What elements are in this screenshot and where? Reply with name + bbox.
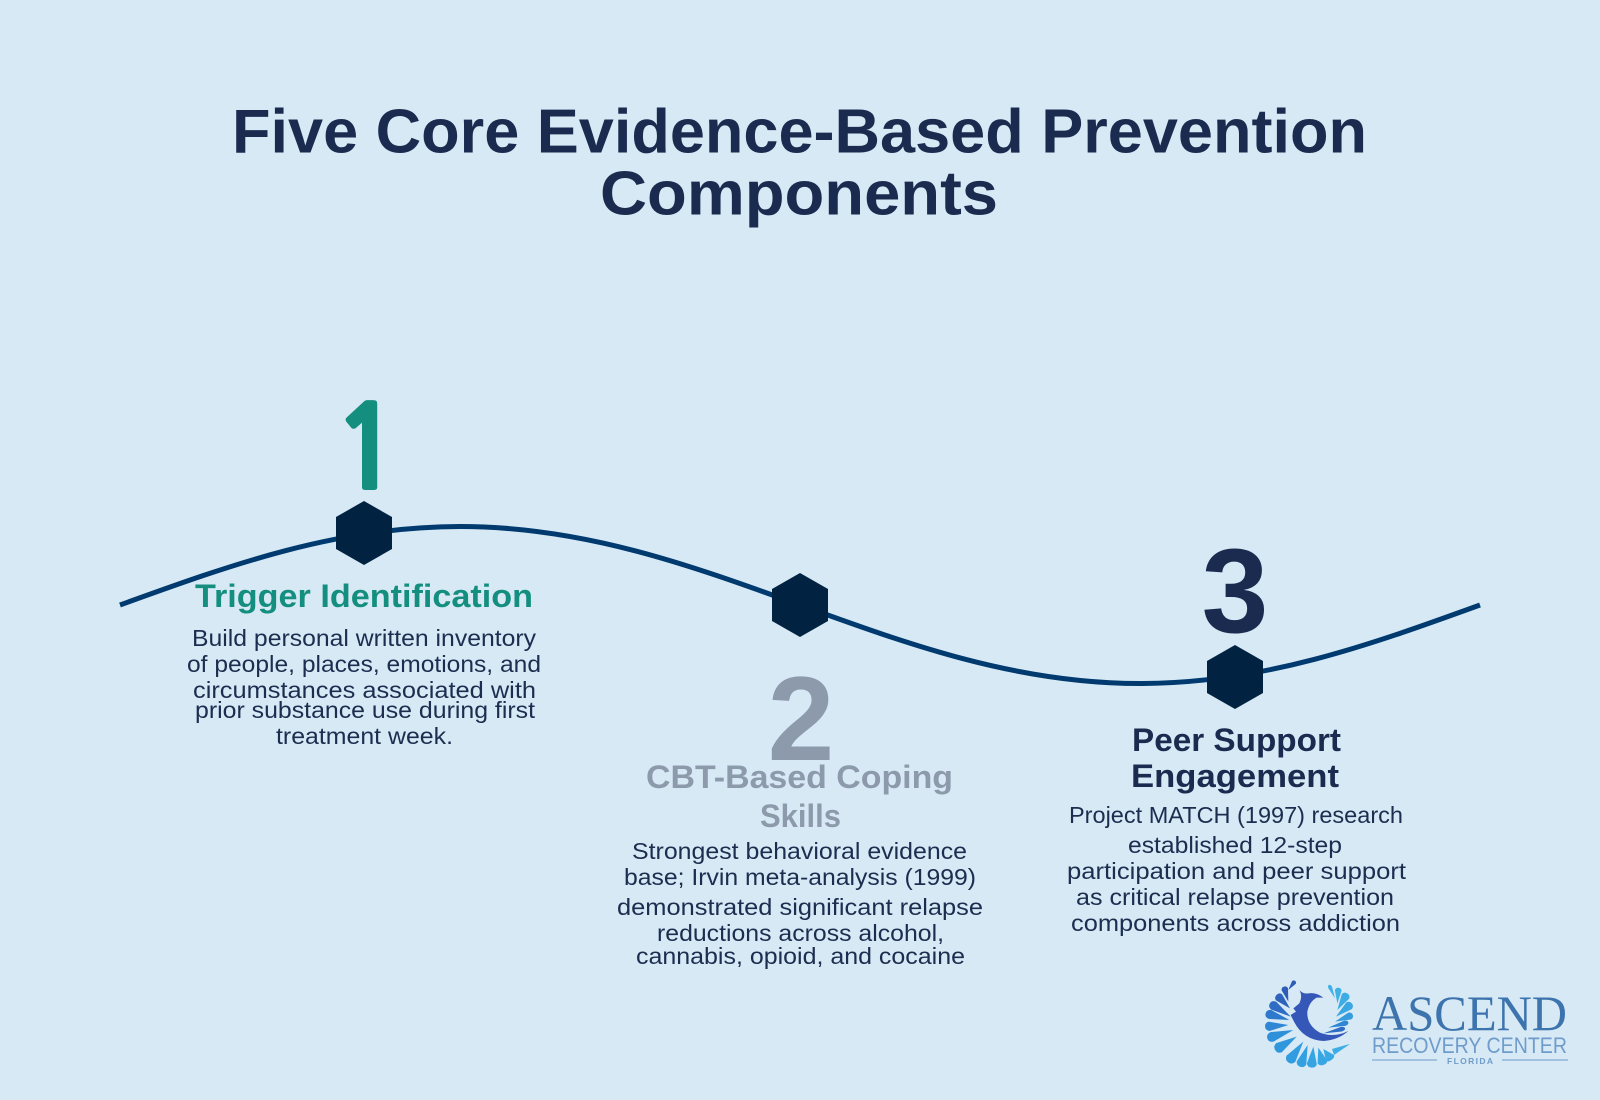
text block: step 1 description: Build personal written inventory (192, 625, 537, 651)
heading: CBT-based coping skills (646, 759, 953, 834)
text block: step 2 description: reductions across alcohol, (657, 920, 944, 946)
text block: step 2 description: cannabis, opioid, and cocaine (636, 943, 965, 969)
panel: step 3 peer support engagement (1067, 524, 1407, 936)
text block: step 3 description: components across addiction (1071, 910, 1400, 936)
text block: step 3 description: participation and peer support (1067, 858, 1407, 884)
heading: CBT-based coping skills: Skills (760, 798, 841, 834)
text block: step 1 description (187, 625, 541, 749)
number 1: 1 (332, 392, 402, 505)
logo: Ascend Recovery Center Florida (1264, 980, 1568, 1068)
title: Components (600, 160, 998, 228)
text block: step 2 description: base; Irvin meta-analysis (1999) (624, 864, 976, 890)
heading: trigger identification: Trigger Identification (195, 578, 533, 614)
wordmark: recovery center: RECOVERY CENTER (1372, 1033, 1567, 1058)
wordmark: ASCEND: ASCEND (1372, 985, 1567, 1041)
text block: step 3 description: as critical relapse prevention (1076, 884, 1394, 910)
text block: step 2 description: Strongest behavioral evidence (632, 838, 967, 864)
heading: peer support engagement: Peer Support (1132, 722, 1341, 758)
number 3: 3 (1202, 524, 1268, 658)
text block: step 1 description: of people, places, emotions, and (187, 651, 541, 677)
title: Five Core Evidence-Based Prevention (232, 98, 1367, 166)
icon: hexagon marker 3 (1207, 645, 1263, 709)
heading: CBT-based coping skills: CBT-Based Coping (646, 759, 953, 795)
text block: step 3 description: Project MATCH (1997) research (1069, 802, 1403, 828)
panel: step 1 trigger identification (187, 392, 541, 749)
text block: step 1 description: prior substance use during first (195, 697, 536, 723)
text block: step 2 description (617, 838, 983, 969)
icon: hexagon marker 2 (772, 573, 828, 637)
heading: peer support engagement: Engagement (1131, 758, 1339, 794)
text block: step 3 description: established 12-step (1128, 832, 1342, 858)
heading: peer support engagement (1131, 722, 1341, 794)
wordmark: florida with rules: FLORIDA (1447, 1056, 1493, 1066)
title (232, 98, 1367, 228)
text block: step 1 description: circumstances associated with (193, 677, 536, 703)
number 2: 2 (768, 652, 834, 786)
text block: step 1 description: treatment week. (276, 723, 453, 749)
panel: step 2 CBT-based coping skills (617, 573, 983, 969)
icon: phoenix emblem (1264, 980, 1355, 1068)
text block: step 2 description: demonstrated significant relapse (617, 894, 983, 920)
wave timeline line (120, 526, 1480, 684)
icon: hexagon marker 1 (336, 501, 392, 565)
text block: step 3 description (1067, 802, 1407, 936)
